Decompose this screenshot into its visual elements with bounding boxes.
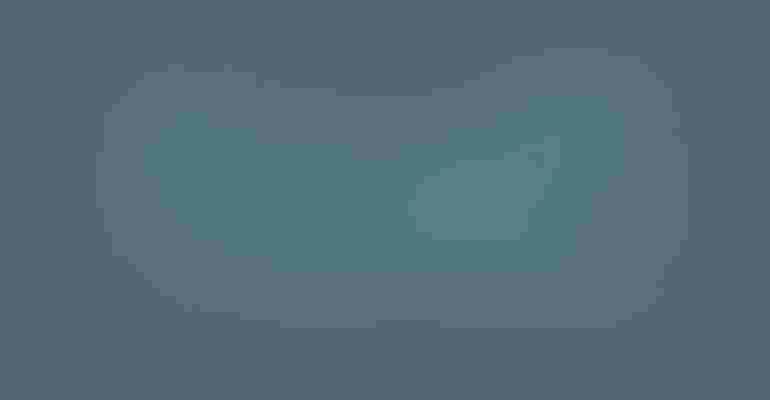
outer region: slate blob	[96, 48, 688, 328]
middle region: teal area	[144, 96, 624, 272]
inner region: light teal patch	[408, 136, 560, 240]
